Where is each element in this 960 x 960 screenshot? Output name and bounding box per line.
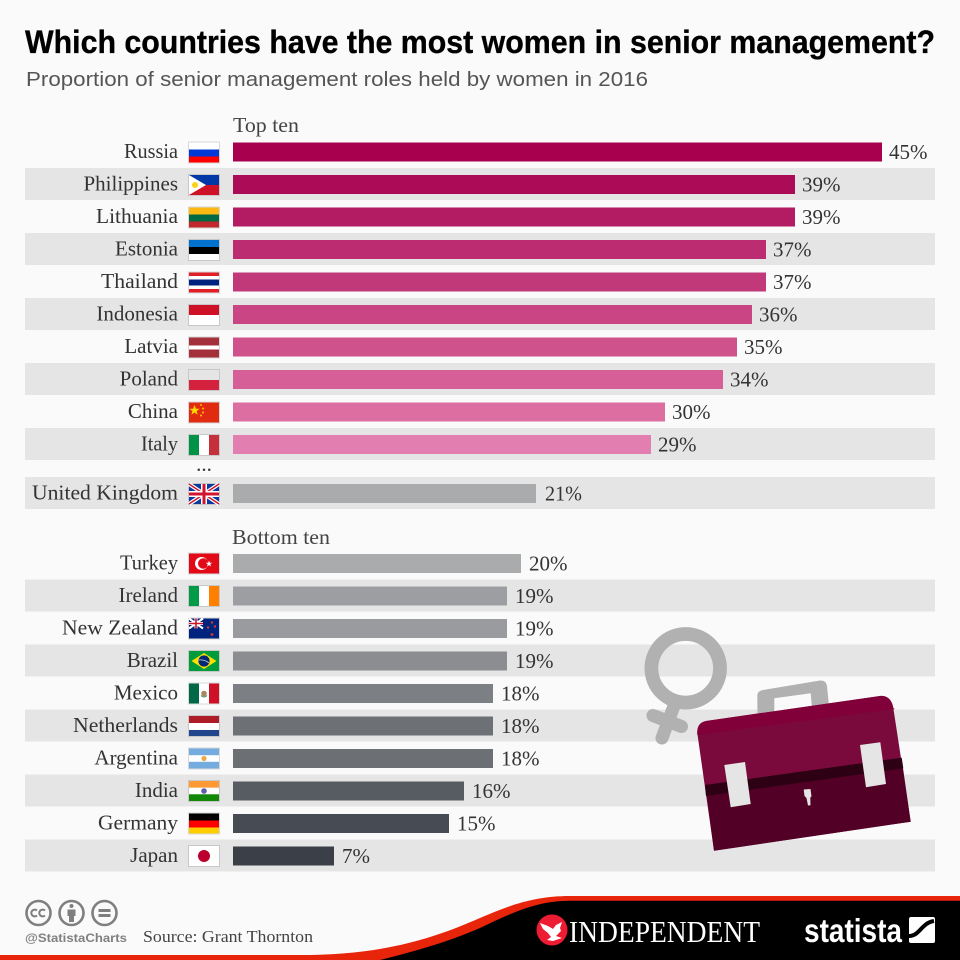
- row: Japan: 7%: [342, 844, 370, 868]
- row: New Zealand: New Zealand: [62, 616, 179, 640]
- heading: top ten: Top ten: [233, 113, 300, 137]
- row: India: India: [135, 778, 179, 802]
- row: Germany: [98, 810, 496, 836]
- flag: Estonia: [188, 239, 220, 261]
- flag: Thailand: [188, 272, 220, 294]
- row: Italy: Italy: [141, 432, 178, 456]
- row: China: China: [128, 399, 179, 423]
- row: New Zealand: 19%: [515, 616, 554, 640]
- row: Argentina: Argentina: [94, 746, 179, 770]
- flag: Philippines: [188, 174, 220, 196]
- row: Russia: 45%: [889, 140, 928, 164]
- row: Brazil: Brazil: [127, 648, 178, 672]
- row: Mexico: 18%: [501, 682, 540, 706]
- flag: Lithuania: [188, 206, 220, 228]
- row: Lithuania: 39%: [802, 205, 840, 229]
- row: Estonia: [25, 233, 935, 265]
- flag: Poland: [188, 369, 220, 391]
- logo: Independent: INDEPENDENT: [569, 915, 760, 949]
- row: Russia: [124, 139, 928, 164]
- row: Italy: 29%: [658, 432, 696, 456]
- row: Italy: [25, 428, 935, 460]
- row: New Zealand: [62, 616, 554, 640]
- row: Brazil: [25, 644, 935, 676]
- flag: Ireland: [188, 585, 220, 607]
- row: Latvia: [124, 334, 782, 359]
- flag: Brazil: [188, 650, 220, 672]
- subtitle: Proportion of senior management roles held by women in 2016: [26, 68, 648, 91]
- row: Poland: 34%: [730, 368, 768, 392]
- logo: Statista: statista: [804, 912, 903, 949]
- row: Mexico: Mexico: [114, 680, 178, 704]
- row: Estonia: 37%: [773, 238, 812, 262]
- row: India: 16%: [472, 779, 510, 803]
- row: Indonesia: [25, 298, 935, 330]
- row: China: 30%: [672, 400, 710, 424]
- handle: StatistaCharts: @StatistaCharts: [25, 931, 127, 945]
- source: Source: Grant Thornton: [143, 927, 314, 946]
- icon: briefcase: [697, 680, 911, 851]
- row: Philippines: Philippines: [83, 172, 178, 196]
- row: Estonia: Estonia: [115, 236, 179, 260]
- flag: Argentina: [188, 748, 220, 770]
- row: Thailand: [101, 269, 812, 294]
- row: Poland: Poland: [120, 366, 178, 390]
- row: Lithuania: Lithuania: [96, 204, 179, 228]
- row: Argentina: 18%: [501, 746, 540, 770]
- title: Which countries have the most women in senior management?: [25, 24, 935, 60]
- flag: Russia: [188, 142, 220, 164]
- row: Indonesia: 36%: [759, 302, 798, 326]
- flag: Japan: [188, 845, 220, 867]
- row: Philippines: [25, 168, 935, 200]
- row: Japan: Japan: [130, 843, 178, 867]
- row: Japan: [25, 840, 935, 872]
- row: Netherlands: [25, 710, 935, 742]
- row: Thailand: 37%: [773, 270, 812, 294]
- flag: China: [188, 402, 220, 424]
- row: Turkey: Turkey: [120, 550, 178, 574]
- row: Ireland: 19%: [515, 584, 554, 608]
- row: Argentina: [94, 746, 540, 770]
- row: Poland: [25, 363, 935, 395]
- flag: Mexico: [188, 682, 220, 704]
- row: Lithuania: [96, 204, 840, 229]
- flag: Latvia: [188, 336, 220, 358]
- flag: Turkey: [188, 552, 220, 574]
- row: Netherlands: 18%: [501, 714, 540, 738]
- row: India: [25, 774, 935, 806]
- row: Philippines: 39%: [802, 172, 840, 196]
- flag: New Zealand: [188, 618, 220, 640]
- row: Latvia: 35%: [744, 335, 782, 359]
- row: Thailand: Thailand: [101, 269, 179, 293]
- row: United Kingdom: [25, 477, 935, 509]
- row: China: [128, 399, 710, 424]
- row: Ireland: [25, 580, 935, 612]
- ellipsis: ...: [196, 452, 212, 476]
- footer band: [0, 896, 960, 960]
- row: Netherlands: Netherlands: [73, 713, 178, 737]
- row: Ireland: Ireland: [119, 583, 178, 607]
- row: Turkey: [120, 550, 568, 576]
- row: Russia: Russia: [124, 139, 179, 163]
- row: Latvia: Latvia: [124, 334, 179, 358]
- row: Indonesia: Indonesia: [96, 302, 179, 326]
- icon: female symbol: [651, 634, 720, 738]
- row: Germany: 15%: [457, 812, 496, 836]
- flag: Netherlands: [188, 715, 220, 737]
- heading: bottom ten: Bottom ten: [232, 525, 331, 549]
- flag: Germany: [188, 812, 220, 834]
- row: Mexico: [114, 680, 540, 706]
- flag: India: [188, 780, 220, 802]
- flag: Italy: [188, 434, 220, 456]
- row: United Kingdom: United Kingdom: [32, 480, 178, 504]
- flag: Indonesia: [188, 304, 220, 326]
- row: United Kingdom: 21%: [545, 482, 582, 506]
- row: Brazil: 19%: [515, 649, 554, 673]
- flag: United Kingdom: [188, 483, 220, 505]
- row: Germany: Germany: [98, 810, 179, 834]
- icons: creative commons: [26, 901, 116, 925]
- row: Turkey: 20%: [529, 552, 568, 576]
